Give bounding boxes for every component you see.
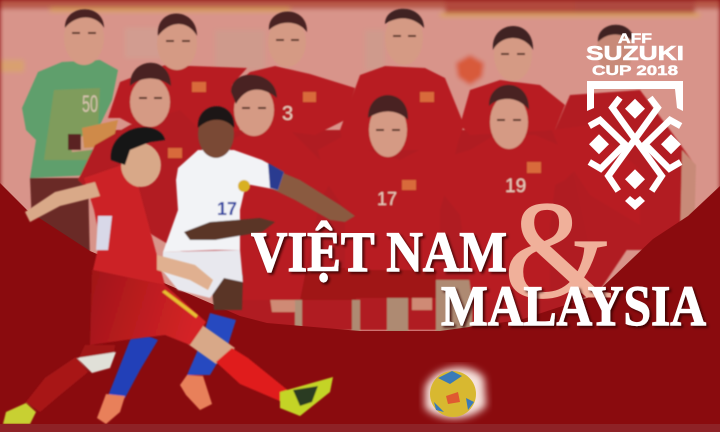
middle row player: 19	[435, 85, 580, 300]
back row player: goalkeeper 50	[22, 9, 118, 260]
back row player: 3	[218, 12, 355, 135]
back row player: 3: 3	[282, 103, 293, 125]
head	[198, 110, 234, 158]
ampersand: &	[504, 173, 613, 328]
dark red lower panel	[0, 183, 720, 432]
shirt	[84, 165, 165, 285]
team photo	[22, 9, 696, 332]
back row player: right	[460, 26, 565, 135]
title: Việt Nam: VIỆT NAM	[251, 221, 507, 284]
head	[121, 143, 161, 187]
middle row player: centre-left	[230, 75, 335, 300]
back row player: behind logo	[555, 25, 696, 250]
arm left	[184, 218, 275, 240]
icon: football	[425, 367, 486, 418]
white shirt	[163, 150, 284, 252]
arm right	[270, 170, 355, 222]
logo: AFF Suzuki Cup 2018	[586, 30, 684, 210]
player: Malaysia number 17: 17	[217, 199, 237, 219]
back row player: 11	[108, 14, 247, 150]
shorts	[90, 270, 206, 345]
logo: AFF Suzuki Cup 2018: AFF	[618, 30, 653, 46]
team: body mass and lower legs	[100, 130, 640, 332]
middle row player: 17	[318, 95, 458, 270]
front leg	[185, 320, 235, 364]
back row player: centre	[340, 9, 464, 150]
player: Malaysia number 17	[97, 106, 355, 424]
bottom strip	[0, 424, 720, 432]
arms	[25, 182, 100, 222]
logo: AFF Suzuki Cup 2018: CUP 2018	[592, 62, 678, 78]
middle row player: 19: 19	[505, 176, 526, 197]
middle row player: 17: 17	[377, 189, 397, 209]
arm of right player	[552, 125, 640, 225]
back row player: goalkeeper 50: 50	[82, 91, 98, 118]
legs	[212, 275, 243, 310]
back leg	[78, 345, 115, 372]
logo: AFF Suzuki Cup 2018: SUZUKI	[586, 43, 684, 65]
player: Vietnam front	[3, 127, 333, 424]
middle row player: left	[78, 63, 200, 250]
